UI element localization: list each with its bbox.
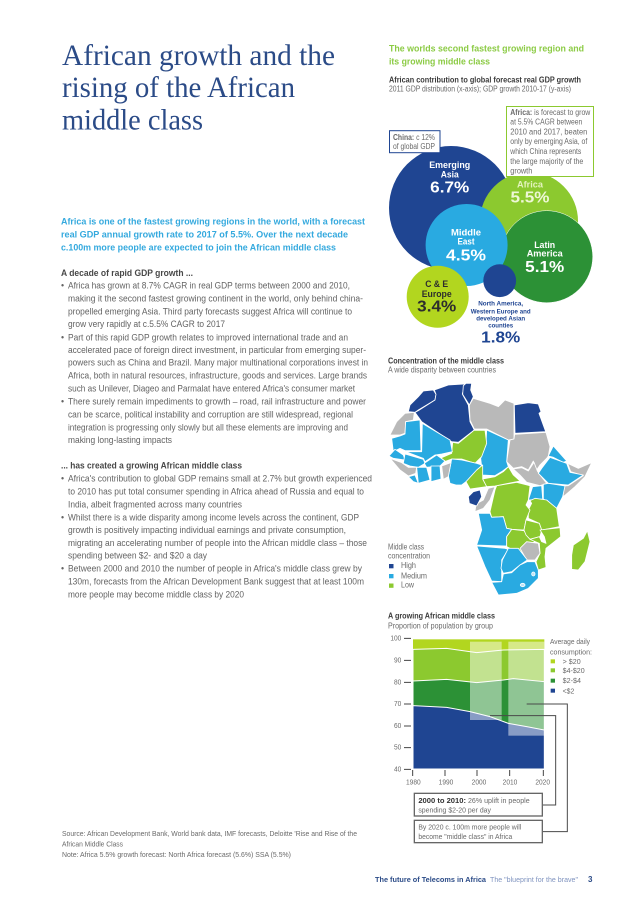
bubble: C and E Europe: C & E [425, 278, 448, 289]
text block: middle class bullets: Africa's contribution to global GDP remains small at 2.7% but growth experienced [68, 474, 372, 484]
area chart heading: Proportion of population by group [388, 622, 494, 631]
text block: middle class bullets: spending between $2- and $20 a day [68, 551, 208, 561]
right column heading [389, 43, 584, 67]
footer: 3 [588, 875, 593, 884]
bubble: Latin America: America [527, 248, 563, 259]
title: middle class [62, 104, 203, 136]
text block: GDP growth bullets: • [61, 397, 64, 407]
bubble: North America, Western Europe and developed Asia: Western Europe and [471, 308, 531, 315]
callout: 2000 to 2010: 2000 to 2010: [418, 798, 466, 805]
bubble: Latin America: Latin [534, 239, 555, 250]
callout: Africa: which China represents [509, 147, 581, 156]
chart legend [550, 639, 592, 695]
bubble: C and E Europe: 3.4% [417, 299, 456, 316]
callout: Africa: at 5.5% CAGR between [510, 118, 582, 127]
x axis: 2000 [472, 779, 486, 786]
callout: Africa: Africa: is forecast to grow [510, 108, 591, 117]
text block: GDP growth bullets: • [61, 332, 64, 342]
connector lines [490, 704, 567, 832]
map legend [388, 543, 430, 590]
callout: Africa [506, 106, 594, 176]
text block: middle class bullets: • [61, 564, 64, 574]
bubble: North America, Western Europe and developed Asia: 1.8% [481, 330, 520, 347]
y axis: 80 [394, 679, 401, 686]
bubble chart heading: African contribution to global forecast real GDP growth [389, 76, 581, 85]
y axis: 40 [394, 766, 401, 773]
bubble: C and E Europe: Europe [422, 288, 452, 299]
area chart heading: A growing African middle class [388, 612, 495, 621]
text block: middle class bullets: Whilst there is a wide disparity among income levels across the continent, GDP [68, 512, 359, 522]
text block: GDP growth bullets: making long-lasting impacts [68, 435, 173, 445]
text block: GDP growth bullets: propelled emerging Asia. Third party forecasts suggest Africa will continue to [68, 306, 352, 316]
chart legend: Average daily [550, 639, 590, 646]
bubble: Middle East: East [458, 236, 474, 247]
y axis [390, 635, 411, 773]
area chart [390, 635, 592, 843]
right column heading: The worlds second fastest growing region and [389, 43, 584, 54]
map legend: concentration [388, 552, 430, 561]
title [62, 39, 335, 136]
area chart heading [388, 612, 495, 631]
source note: African Middle Class [62, 840, 123, 848]
text block: GDP growth bullets: Africa has grown at 8.7% CAGR in real GDP terms between 2000 and 2010, [68, 281, 350, 291]
footer: The future of Telecoms in Africa [375, 875, 487, 884]
bubble chart heading [389, 76, 581, 94]
callout: 2000 to 2010 [414, 793, 542, 816]
right column heading: its growing middle class [389, 56, 490, 67]
map heading: Concentration of the middle class [388, 357, 504, 366]
text block: middle class bullets: growth is positively impacting individual earnings and private consumption, [68, 525, 346, 535]
y axis: 60 [394, 723, 401, 730]
bubble: Africa: 5.5% [510, 190, 550, 207]
bubble: emerging Asia: Asia [441, 168, 459, 179]
text block: middle class bullets: • [61, 512, 64, 522]
callout: by 2020: By 2020 c. 100m more people will [418, 825, 522, 832]
callout: 2000 to 2010: spending $2-20 per day [418, 808, 491, 815]
heading: a decade of rapid GDP growth: A decade of rapid GDP growth ... [61, 268, 193, 278]
text block: middle class bullets: Between 2000 and 2010 the number of people in Africa's middle class grew by [68, 564, 363, 574]
text block: middle class bullets: to 2010 has put total consumer spending in Africa ahead of Russia and equal to [68, 487, 364, 497]
text block: middle class bullets: more people may become middle class by 2020 [68, 590, 244, 600]
x axis: 1980 [406, 779, 421, 786]
chart legend: <$2 [563, 688, 574, 695]
lead paragraph [61, 216, 365, 252]
chart legend: $2-$4 [563, 678, 581, 685]
chart legend: $4-$20 [563, 668, 585, 675]
bubble: Africa: Africa [517, 179, 544, 190]
y axis: 50 [394, 745, 401, 752]
map legend: Low [401, 581, 414, 590]
y axis: 70 [394, 701, 401, 708]
bubble: North America, Western Europe and developed Asia [471, 264, 531, 347]
callout: China: of global GDP [393, 142, 435, 151]
heading: growing African middle class: ... has created a growing African middle class [61, 461, 242, 471]
title: African growth and the [62, 39, 335, 72]
title: rising of the African [62, 71, 295, 104]
bubble: emerging Asia: Emerging [429, 159, 470, 170]
text block: GDP growth bullets: accelerated pace of foreign direct investment, in particular from emerging super- [68, 345, 366, 355]
text block: middle class bullets [61, 474, 372, 600]
callout: Africa: 2010 and 2017, beaten [510, 127, 587, 136]
bubble chart heading: 2011 GDP distribution (x-axis); GDP growth 2010-17 (y-axis) [389, 85, 571, 94]
text block: GDP growth bullets: can be scarce, political instability and corruption are still widespread, regional [68, 410, 353, 420]
bubble: Middle East: Middle [451, 227, 481, 238]
text block: middle class bullets: • [61, 474, 64, 484]
bubble: Latin America: 5.1% [525, 259, 564, 276]
text block: GDP growth bullets: There surely remain impediments to growth – road, rail infrastructure and power [68, 397, 366, 407]
map heading: A wide disparity between countries [388, 366, 496, 375]
text block: GDP growth bullets: Part of this rapid GDP growth relates to improved international trade and an [68, 332, 348, 342]
footer [375, 875, 593, 884]
bubble: North America, Western Europe and developed Asia: North America, [478, 301, 523, 308]
map legend: Medium [401, 572, 427, 581]
stacked areas [413, 639, 544, 769]
callout: by 2020 [414, 820, 542, 843]
bubble: Middle East: 4.5% [446, 248, 486, 265]
bubble: Africa [480, 172, 578, 270]
bubble: Latin America [501, 211, 593, 303]
map legend: High [401, 561, 416, 570]
source note [62, 829, 357, 859]
y axis: 90 [394, 657, 401, 664]
callout: China: China: c 12% [393, 133, 435, 142]
bubble: emerging Asia: 6.7% [430, 180, 469, 197]
bubble chart [389, 106, 594, 347]
x axis: 1990 [439, 779, 453, 786]
text block: GDP growth bullets [61, 281, 368, 445]
text block: GDP growth bullets: Africa, both in natural resources, infrastructure, goods and services. Large brands [68, 371, 368, 381]
callout: Africa: growth [510, 166, 532, 175]
lead paragraph: c.100m more people are expected to join the African middle class [61, 242, 336, 252]
lead paragraph: real GDP annual growth rate to 2017 of 5.5%. Over the next decade [61, 230, 348, 240]
text block: middle class bullets: migrating an accelerating number of people into the African middle class – those [68, 538, 367, 548]
footer: The "blueprint for the brave" [490, 875, 578, 884]
x axis: 2020 [535, 779, 550, 786]
bubble: emerging Asia [389, 146, 513, 270]
text block: GDP growth bullets: integration is progressing only slowly but all these elements are improving and [68, 423, 348, 433]
callout: Africa: only by emerging Asia, of [510, 137, 588, 146]
text block: GDP growth bullets: grow very rapidly at c.5.5% CAGR to 2017 [68, 319, 225, 329]
text block: middle class bullets: 130m, forecasts from the African Development Bank suggest that at least 100m [68, 577, 364, 587]
callout: China [390, 131, 440, 153]
map heading [388, 357, 504, 375]
text block: GDP growth bullets: such as Unilever, Diageo and Parmalat have entered Africa's consumer market [68, 384, 356, 394]
text block: middle class bullets: India, albeit fragmented across many countries [68, 500, 243, 510]
text block: GDP growth bullets: powers such as China and Brazil. Many major multinational corporations invest in [68, 358, 368, 368]
bubble: Middle East [426, 204, 508, 286]
chart legend: > $20 [563, 659, 581, 666]
text block: GDP growth bullets: • [61, 281, 64, 291]
chart legend: consumption: [550, 650, 592, 657]
lead paragraph: Africa is one of the fastest growing regions in the world, with a forecast [61, 216, 365, 226]
map of Africa [389, 383, 592, 595]
bubble: C and E Europe [407, 266, 469, 328]
callout: Africa: the large majority of the [510, 157, 583, 166]
source note: Note: Africa 5.5% growth forecast: North Africa forecast (5.6%) SSA (5.5%) [62, 850, 291, 859]
x axis [406, 770, 550, 786]
callout: 2000 to 2010: 26% uplift in people [468, 798, 530, 805]
callout: by 2020: become "middle class" in Africa [418, 834, 512, 841]
y axis: 100 [390, 635, 401, 642]
source note: Source: African Development Bank, World bank data, IMF forecasts, Deloitte 'Rise and Rise of the [62, 829, 357, 838]
text block: GDP growth bullets: making it the second fastest growing continent in the world, only behind china- [68, 294, 363, 304]
map legend: Middle class [388, 543, 424, 552]
bubble: North America, Western Europe and developed Asia: developed Asian [476, 316, 525, 323]
bubble: North America, Western Europe and developed Asia: counties [488, 323, 513, 330]
x axis: 2010 [503, 779, 517, 786]
